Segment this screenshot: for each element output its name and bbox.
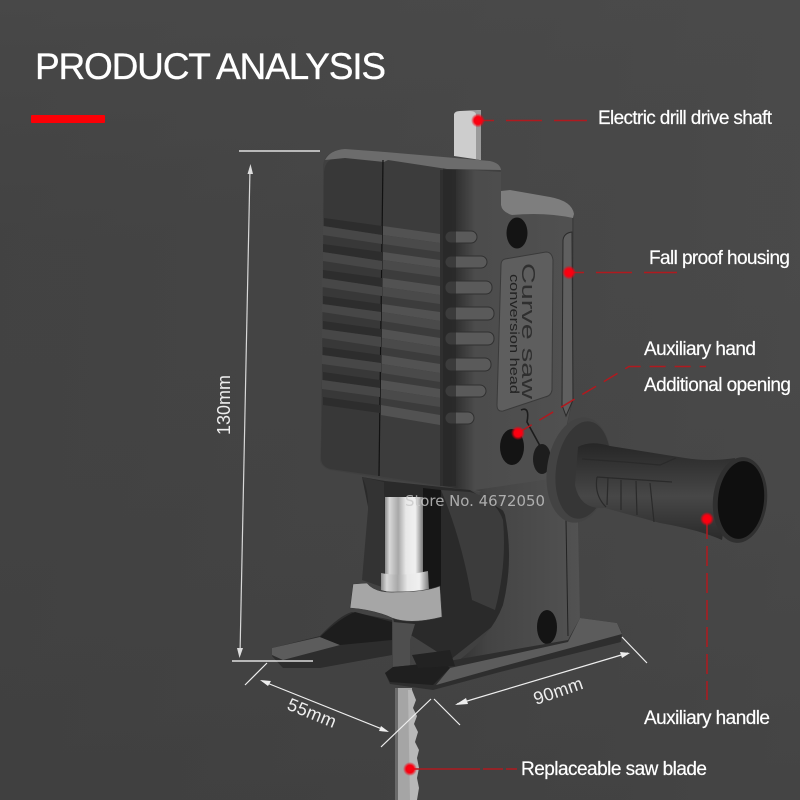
callout: auxiliary hand additional opening: Additional opening: [644, 375, 791, 396]
dimension: depth: [245, 663, 389, 732]
chrome cylinder: [381, 497, 429, 594]
dark side strip: [440, 170, 456, 486]
drive shaft: [454, 110, 481, 160]
mounting holes: [500, 218, 528, 465]
callout: auxiliary handle: Auxiliary handle: [644, 708, 770, 729]
callout: fall proof housing: [562, 248, 790, 280]
plate text: Curve saw: [518, 263, 538, 401]
right rail: [562, 232, 573, 416]
dimension: height: [214, 151, 320, 661]
90mm label: 90mm: [531, 673, 586, 709]
pedestal leg: [448, 478, 580, 668]
side face: [443, 168, 572, 492]
reciprocating post area: [362, 477, 512, 660]
callout: replaceable saw blade: [403, 759, 707, 780]
callout: electric drill drive shaft: [471, 108, 773, 129]
title: PRODUCT ANALYSIS: [35, 46, 386, 87]
dimension: width: [381, 637, 647, 747]
strap: [521, 409, 545, 455]
knob: [533, 444, 551, 474]
handle mouth: [709, 454, 771, 546]
callout: auxiliary hand additional opening: [511, 339, 791, 440]
callout: electric drill drive shaft: Electric drill drive shaft: [598, 108, 773, 129]
seam: [379, 160, 383, 476]
left foot: [272, 612, 392, 668]
front face right: [379, 157, 443, 486]
55mm label: 55mm: [285, 694, 339, 732]
saw blade: [393, 622, 419, 800]
product: saw conversion head: [272, 110, 771, 800]
auxiliary handle: [540, 413, 771, 546]
base plate: [385, 618, 622, 690]
red title bar: [31, 115, 105, 123]
housing: [320, 149, 580, 662]
name plate: [497, 252, 553, 411]
collar: [350, 583, 442, 621]
side vents: [445, 231, 494, 424]
watermark: Store No. 4672050: [405, 492, 545, 510]
130mm label: 130mm: [214, 375, 234, 435]
callout: auxiliary handle: [644, 512, 770, 729]
top highlights: [325, 149, 501, 170]
front face left: [321, 157, 383, 476]
callout: replaceable saw blade: Replaceable saw blade: [521, 759, 707, 780]
front ribs left: [322, 218, 382, 413]
name plate: conversion head: [507, 274, 521, 394]
callout: fall proof housing: Fall proof housing: [649, 248, 790, 269]
handle flange: [540, 413, 618, 527]
handle grip: [575, 443, 735, 540]
front ribs right: [381, 226, 440, 425]
callout: auxiliary hand additional opening: Auxiliary hand: [644, 339, 756, 360]
